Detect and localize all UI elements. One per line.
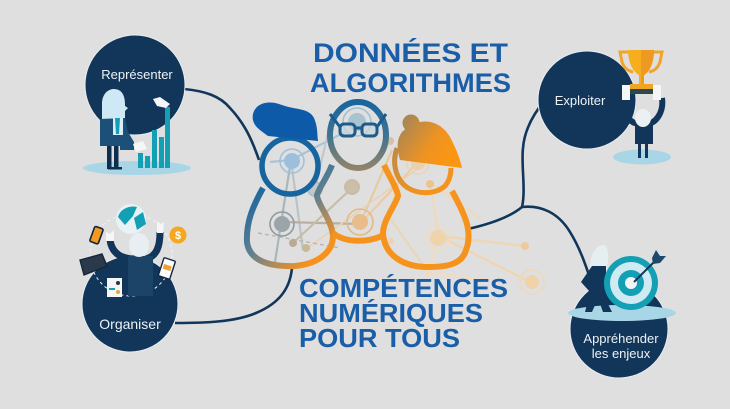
panel: représenter — [83, 35, 191, 175]
heading: compétences numériques pour tous: NUMÉRIQUES — [299, 298, 483, 328]
figure: holding trophy — [621, 85, 662, 158]
icon: phone — [90, 226, 103, 244]
label: Représenter — [101, 67, 173, 82]
panel: appréhender les enjeux — [568, 245, 676, 378]
label line 2: les enjeux — [592, 346, 651, 361]
label: Organiser — [99, 316, 161, 332]
dashed orbit — [90, 214, 172, 296]
icon: target — [604, 256, 658, 310]
panel: organiser — [80, 204, 186, 352]
circle — [85, 35, 185, 135]
connector lines — [175, 89, 592, 323]
icon: laptop — [80, 254, 107, 275]
circle — [570, 280, 668, 378]
person: right body — [383, 165, 469, 267]
bar chart — [138, 107, 170, 168]
person: right hair — [398, 114, 462, 168]
heading: compétences numériques pour tous — [299, 273, 508, 353]
icon: dollar coin: $ — [175, 230, 181, 242]
icon: dollar coin — [170, 226, 186, 244]
ground shadow — [613, 150, 671, 164]
icon: globe — [116, 204, 146, 234]
label: Appréhender — [583, 331, 659, 346]
person: left hair — [253, 102, 318, 141]
label: Exploiter — [555, 93, 606, 108]
network graph behind the people — [258, 108, 544, 294]
heading: compétences numériques pour tous: POUR TOUS — [299, 323, 460, 353]
circle — [82, 256, 178, 352]
heading: données et algorithmes: ALGORITHMES — [310, 68, 511, 98]
people outlines — [247, 102, 469, 267]
figure: arms raised — [106, 221, 164, 296]
figure: analyst — [100, 89, 170, 170]
person: left head — [262, 138, 318, 194]
icon: trophy — [620, 50, 662, 94]
person: middle head — [330, 102, 386, 168]
ground shadow — [83, 161, 191, 175]
icon: document — [107, 278, 122, 297]
person: right head — [395, 148, 451, 193]
connector body between people — [333, 233, 384, 241]
heading: données et algorithmes — [310, 37, 511, 98]
heading: données et algorithmes: DONNÉES ET — [313, 37, 509, 68]
figure: archer — [581, 245, 612, 312]
person: left body — [247, 165, 333, 266]
icon: tablet — [158, 258, 175, 279]
circle — [538, 51, 636, 149]
ground shadow — [568, 305, 676, 321]
heading: compétences numériques pour tous: COMPÉTENCES — [299, 273, 508, 303]
icon: arrow in target — [634, 250, 666, 282]
panel: exploiter — [538, 50, 671, 164]
icon: glasses — [330, 114, 386, 136]
